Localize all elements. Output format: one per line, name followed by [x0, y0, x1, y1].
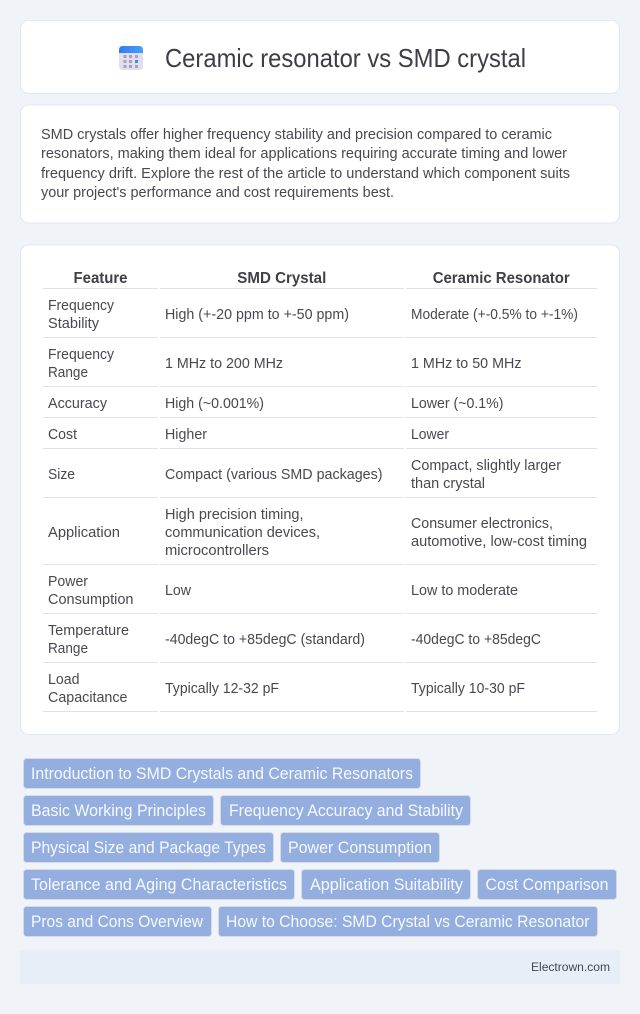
tag: power consumption — [280, 832, 440, 862]
row: temperature range: Range — [48, 641, 88, 657]
row: temperature range: -40degC to +85degC (standard) — [165, 632, 365, 648]
row: application: High precision timing, — [165, 507, 304, 523]
panel: topic tags — [24, 758, 616, 936]
text block: intro paragraph: resonators, making them ideal for applications requiring accurate timing and lower — [41, 145, 567, 162]
row: size: Size — [48, 467, 75, 483]
row: load capacitance: Typically 10-30 pF — [411, 681, 525, 697]
tag: application suitability: Application Suitability — [310, 875, 464, 894]
row: cost: Cost — [48, 427, 77, 443]
row: application: Consumer electronics, — [411, 516, 553, 532]
tag: tolerance and aging — [24, 870, 294, 900]
row: load capacitance: Typically 12-32 pF — [165, 681, 279, 697]
row: power consumption — [48, 574, 518, 608]
tag: working principles — [24, 796, 214, 826]
panel: comparison table — [20, 245, 620, 734]
row: load capacitance: Capacitance — [48, 690, 128, 706]
row: application: Application — [48, 525, 120, 541]
footer: Electrown.com — [531, 960, 610, 974]
tag: power consumption: Power Consumption — [288, 838, 432, 857]
table header — [74, 270, 570, 287]
row: accuracy: Lower (~0.1%) — [411, 396, 504, 412]
row: accuracy: High (~0.001%) — [165, 396, 264, 412]
panel: description — [20, 105, 620, 223]
row: frequency stability: Frequency — [48, 298, 115, 314]
tag: introduction: Introduction to SMD Crystals and Ceramic Resonators — [31, 764, 413, 783]
tag: pros and cons: Pros and Cons Overview — [31, 912, 204, 931]
row: frequency stability: Stability — [48, 316, 100, 332]
text block: intro paragraph — [41, 126, 570, 201]
tag: how to choose — [218, 906, 598, 936]
row: load capacitance — [48, 672, 525, 706]
row: temperature range: -40degC to +85degC — [411, 632, 541, 648]
row: size: than crystal — [411, 476, 485, 492]
row: size: Compact (various SMD packages) — [165, 467, 382, 483]
title: Ceramic resonator vs SMD crystal — [165, 43, 526, 73]
row: frequency range — [48, 347, 522, 381]
row: power consumption: Consumption — [48, 592, 134, 608]
row: frequency range: 1 MHz to 50 MHz — [411, 356, 522, 372]
row: frequency range: 1 MHz to 200 MHz — [165, 356, 283, 372]
tag: cost comparison — [478, 870, 616, 900]
row: cost: Higher — [165, 427, 207, 443]
panel: title header — [20, 20, 620, 94]
row: accuracy: Accuracy — [48, 396, 108, 412]
tag: how to choose: How to Choose: SMD Crystal vs Ceramic Resonator — [226, 912, 590, 931]
row: accuracy — [48, 396, 504, 412]
row: load capacitance: Load — [48, 672, 80, 688]
row: application: automotive, low-cost timing — [411, 534, 587, 550]
table header: Feature — [74, 270, 128, 287]
tag: pros and cons — [24, 906, 212, 936]
row: frequency stability: Moderate (+-0.5% to +-1%) — [411, 307, 578, 323]
tag: physical size — [24, 832, 274, 862]
row: frequency stability — [48, 298, 578, 332]
tag: working principles: Basic Working Principles — [31, 801, 206, 820]
row: power consumption: Low to moderate — [411, 583, 518, 599]
row: frequency range: Range — [48, 365, 88, 381]
tag: physical size: Physical Size and Package Types — [31, 838, 266, 857]
row: size: Compact, slightly larger — [411, 458, 561, 474]
tag: tolerance and aging: Tolerance and Aging Characteristics — [31, 875, 287, 894]
text block: intro paragraph: your project's performance and cost requirements best. — [41, 184, 394, 201]
row: application: communication devices, — [165, 525, 320, 541]
tag: frequency accuracy: Frequency Accuracy and Stability — [229, 801, 464, 820]
row: frequency range: Frequency — [48, 347, 115, 363]
row: temperature range: Temperature — [48, 623, 129, 639]
row: temperature range — [48, 623, 541, 657]
row: frequency stability: High (+-20 ppm to +-50 ppm) — [165, 307, 349, 323]
row: application — [48, 507, 587, 559]
row: power consumption: Low — [165, 583, 191, 599]
tag: introduction — [24, 758, 420, 788]
icon: calendar — [119, 46, 143, 70]
tag: application suitability — [302, 870, 470, 900]
footer — [20, 950, 620, 984]
table header: Ceramic Resonator — [433, 270, 570, 287]
table header: SMD Crystal — [237, 270, 326, 287]
tag: cost comparison: Cost Comparison — [486, 875, 608, 894]
row: cost: Lower — [411, 427, 449, 443]
row: size — [48, 458, 561, 492]
text block: intro paragraph: SMD crystals offer higher frequency stability and precision compared to ceramic — [41, 126, 552, 143]
row: cost — [48, 427, 449, 443]
tag: frequency accuracy — [220, 796, 470, 826]
row: power consumption: Power — [48, 574, 88, 590]
row: application: microcontrollers — [165, 543, 269, 559]
text block: intro paragraph: frequency drift. Explore the rest of the article to understand which component suits — [41, 165, 570, 182]
